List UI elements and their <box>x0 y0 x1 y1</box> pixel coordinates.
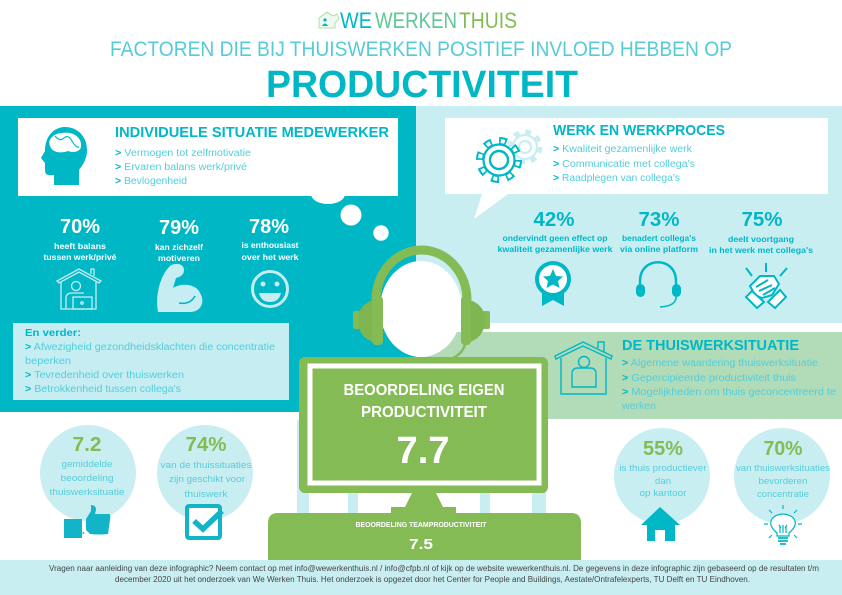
list: > Gepercipieerde productiviteit thuis <box>622 373 796 384</box>
logo <box>319 8 517 33</box>
en verder box: > Tevredenheid over thuiswerken <box>25 370 184 381</box>
panel: individuele situatie background <box>0 106 416 412</box>
headset person <box>353 250 490 358</box>
heading: DE THUISWERKSITUATIE <box>622 337 799 354</box>
stat: 78%: 78% <box>249 216 289 238</box>
circle: 70% concentratie: 70% <box>764 438 803 460</box>
list: > Ervaren balans werk/privé <box>115 162 247 173</box>
icon: checkbox <box>187 506 222 538</box>
headband <box>376 250 467 300</box>
circle: 74% thuissituaties: zijn geschikt voor <box>169 474 245 485</box>
circle: 55% productiever: 55% <box>643 438 683 460</box>
stat: 79% <box>155 217 203 263</box>
circle: 7.2 beoordeling: thuiswerksituatie <box>50 487 124 498</box>
icon: head with brain <box>41 127 87 185</box>
list: > Mogelijkheden om thuis geconcentreerd te <box>622 387 836 398</box>
stat: 70% <box>44 216 117 262</box>
circle: 7.2 beoordeling <box>40 425 136 521</box>
icon: thumbs up <box>64 505 110 538</box>
icon: house with laptop <box>57 269 101 309</box>
icon: handshake <box>746 263 787 308</box>
logo: WERKEN <box>375 8 457 33</box>
icon: medal <box>537 263 569 306</box>
icon: house with person <box>555 342 612 394</box>
en verder box: En verder: <box>25 328 81 339</box>
en verder box: > Betrokkenheid tussen collega's <box>25 384 181 395</box>
list: > Communicatie met collega's <box>553 159 695 170</box>
circle: 55% productiever: dan <box>655 476 671 487</box>
heading: INDIVIDUELE SITUATIE MEDEWERKER <box>115 124 389 141</box>
stat: 73% <box>620 209 698 254</box>
stat: 75%: deelt voortgang <box>728 235 794 244</box>
monitor: beoordeling eigen productiviteit <box>299 357 548 493</box>
circle: 74% thuissituaties: thuiswerk <box>184 489 228 500</box>
base: beoordeling teamproductiviteit: BEOORDELING TEAMPRODUCTIVITEIT <box>356 522 487 529</box>
footer: Vragen naar aanleiding van deze infographic? Neem contact op met info@wewerkenthuis.nl / info@cfpb.nl of kijk op de website wewerkenthuis.nl. De gegevens in deze infographic zijn gebaseerd op de resultaten t/m <box>49 564 819 573</box>
panel: werk en werkproces <box>445 118 828 308</box>
icon: headset <box>636 262 681 307</box>
circle: 70% concentratie: concentratie <box>757 489 809 500</box>
list <box>115 148 251 187</box>
list: > Vermogen tot zelfmotivatie <box>115 148 251 159</box>
circle: 55% productiever: op kantoor <box>640 488 686 499</box>
panel: thuiswerksituatie background <box>417 332 842 419</box>
speech box <box>445 118 828 219</box>
stat: 73%: benadert collega's <box>622 234 697 243</box>
footer <box>0 560 842 595</box>
panel: de thuiswerksituatie <box>555 337 836 412</box>
list <box>553 144 695 184</box>
stat: 75%: 75% <box>742 209 783 231</box>
list: > Kwaliteit gezamenlijke werk <box>553 144 693 155</box>
circle: 74% thuissituaties: 74% <box>186 434 227 456</box>
monitor legs <box>297 420 546 513</box>
icon: light bulb <box>764 505 802 544</box>
icon: gears <box>480 132 540 179</box>
stat: 73%: via online platform <box>620 245 698 254</box>
title: PRODUCTIVITEIT <box>266 64 578 106</box>
list: > Algemene waardering thuiswerksituatie <box>622 358 818 369</box>
panel: individuele situatie medewerker <box>13 118 398 400</box>
icon: smiley <box>252 272 288 306</box>
circle: 55% productiever <box>614 428 710 524</box>
circle: 74% thuissituaties: van de thuissituaties <box>160 460 252 471</box>
circle: 70% concentratie <box>734 428 830 524</box>
stat: 42% <box>498 209 613 254</box>
stat: 73%: 73% <box>638 209 680 231</box>
circle: 55% productiever: is thuis productiever <box>620 463 706 474</box>
left ear cup <box>353 296 383 345</box>
circle: 74% thuissituaties <box>157 425 253 521</box>
circle: 7.2 beoordeling: beoordeling <box>60 473 114 484</box>
list: > Raadplegen van collega's <box>553 173 680 184</box>
stat: 70%: tussen werk/privé <box>44 253 117 262</box>
circle: 70% concentratie: bevorderen <box>758 476 808 487</box>
monitor: beoordeling eigen productiviteit: 7.7 <box>396 430 450 472</box>
stat: 79%: motiveren <box>158 254 200 263</box>
header <box>110 8 732 106</box>
footer: december 2020 uit het onderzoek van We Werken Thuis. Het onderzoek is opgezet door het Center for People and Buildings, Aestate/Ontrafelexperts, TU Delft en TU Eindhoven. <box>115 575 750 584</box>
en verder box: beperken <box>25 356 71 367</box>
stat: 79%: kan zichzelf <box>155 243 203 252</box>
logo: THUIS <box>459 8 517 33</box>
logo: WE <box>340 8 372 33</box>
stat: 78%: over het werk <box>242 253 299 262</box>
stat: 75%: in het werk met collega's <box>709 246 814 255</box>
speech box <box>18 118 398 241</box>
list: > Bevlogenheid <box>115 176 187 187</box>
list: werken <box>621 401 656 412</box>
list <box>621 358 836 412</box>
subtitle: FACTOREN DIE BIJ THUISWERKEN POSITIEF INVLOED HEBBEN OP <box>110 38 732 61</box>
en verder box <box>13 323 289 400</box>
panel: werk en werkproces background <box>416 106 842 323</box>
stat: 75% <box>709 209 814 255</box>
head <box>380 261 462 357</box>
circle: 70% concentratie: van thuiswerksituaties <box>736 463 830 474</box>
heading: WERK EN WERKPROCES <box>553 122 725 139</box>
icon: house <box>641 507 680 541</box>
stat: 42%: 42% <box>534 209 575 231</box>
circle: 7.2 beoordeling: 7.2 <box>72 434 102 456</box>
monitor: beoordeling eigen productiviteit: PRODUCTIVITEIT <box>361 404 488 421</box>
stat: 70%: heeft balans <box>54 242 107 251</box>
circle: 7.2 beoordeling: gemiddelde <box>62 459 112 470</box>
microphone arm <box>453 344 465 358</box>
monitor: beoordeling eigen productiviteit: BEOORDELING EIGEN <box>344 382 504 399</box>
stat: 79%: 79% <box>159 217 199 239</box>
stat: 70%: 70% <box>60 216 100 238</box>
en verder box: > Afwezigheid gezondheidsklachten die concentratie <box>25 342 275 353</box>
stat: 78% <box>242 216 299 262</box>
base: beoordeling teamproductiviteit: 7.5 <box>409 536 433 553</box>
stat: 42%: ondervindt geen effect op <box>502 234 608 243</box>
stat: 78%: is enthousiast <box>242 241 299 250</box>
right ear cup <box>461 296 490 345</box>
icon: flexed arm <box>157 264 202 312</box>
monitor stand <box>391 493 456 514</box>
stat: 42%: kwaliteit gezamenlijke werk <box>498 245 613 254</box>
base: beoordeling teamproductiviteit <box>268 513 581 560</box>
